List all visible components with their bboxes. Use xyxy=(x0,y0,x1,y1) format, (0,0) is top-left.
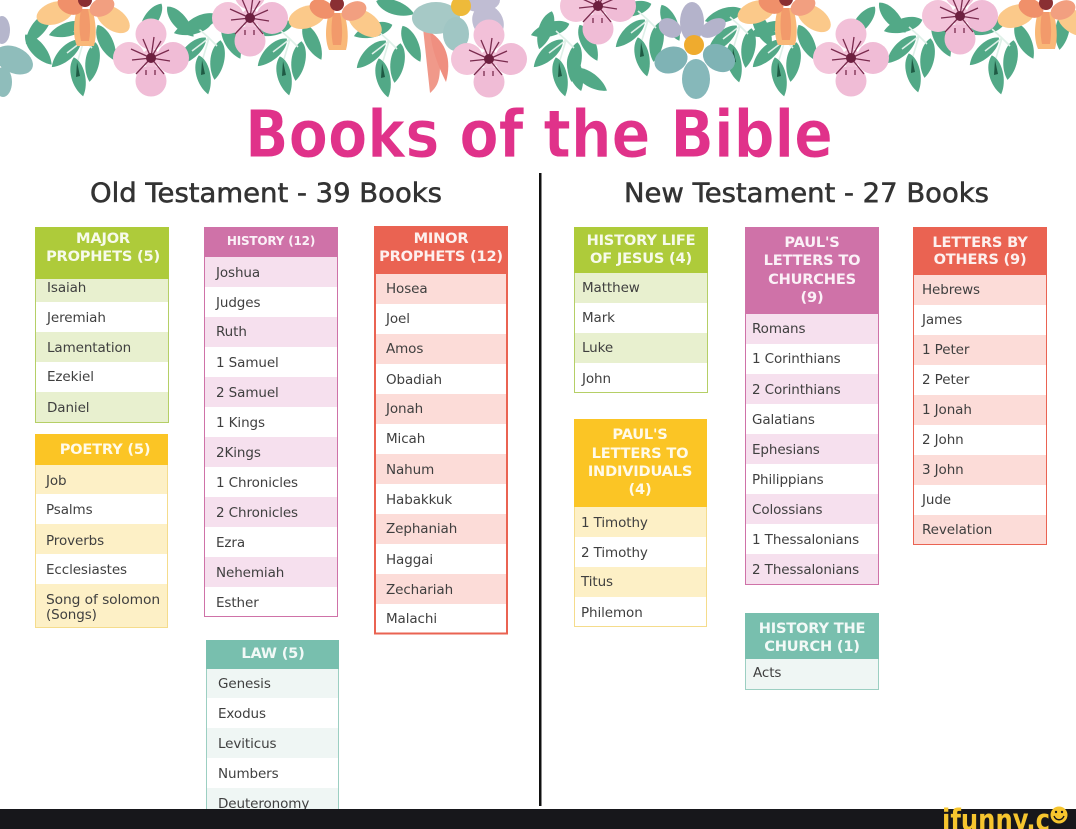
panel: history the church xyxy=(745,613,879,690)
panel: letters by others: 1 Jonah xyxy=(922,402,972,418)
panel: letters by others: OTHERS (9) xyxy=(934,251,1026,268)
panel: poetry xyxy=(35,434,168,628)
panel: poetry: POETRY (5) xyxy=(60,441,150,458)
panel: paul's letters to churches: 1 Thessalonians xyxy=(752,532,859,548)
panel: minor prophets: Haggai xyxy=(386,552,433,568)
panel: law: Leviticus xyxy=(218,736,277,752)
panel: history the church: HISTORY THE xyxy=(759,620,865,637)
panel: major prophets: Isaiah xyxy=(47,280,86,296)
panel: poetry: Song of solomon xyxy=(46,592,160,608)
panel: paul's letters to churches: 2 Thessalonians xyxy=(752,562,859,578)
panel: history: Ruth xyxy=(216,324,247,340)
panel: major prophets xyxy=(35,227,169,422)
panel: letters by others: Hebrews xyxy=(922,282,980,298)
panel: minor prophets: Nahum xyxy=(386,462,434,478)
panel: poetry: Psalms xyxy=(46,502,93,518)
panel: paul's letters to churches: LETTERS TO xyxy=(764,252,860,269)
panel: law: LAW (5) xyxy=(241,645,305,662)
panel: letters by others: 1 Peter xyxy=(922,342,970,358)
panel: letters by others: Revelation xyxy=(922,522,992,538)
panel: paul's letters to churches: Romans xyxy=(752,321,806,337)
panel: letters by others: 3 John xyxy=(922,462,964,478)
panel: major prophets: Lamentation xyxy=(47,340,131,356)
panel: history: Ezra xyxy=(216,535,245,551)
panel: minor prophets: Amos xyxy=(386,341,423,357)
heading: old testament: Old Testament - 39 Books xyxy=(90,178,442,209)
panel: minor prophets: MINOR xyxy=(414,230,468,247)
panel: letters by others: 2 John xyxy=(922,432,964,448)
panel: history: 2 Samuel xyxy=(216,385,279,401)
panel: history xyxy=(204,227,338,616)
panel: history the church: Acts xyxy=(753,665,781,681)
panel: history life of jesus: Luke xyxy=(582,340,613,356)
panel: minor prophets: Micah xyxy=(386,431,425,447)
panel: paul's letters to churches xyxy=(745,227,879,584)
panel: history: HISTORY (12) xyxy=(227,234,315,248)
panel: paul's letters to churches: Ephesians xyxy=(752,442,820,458)
teal lavender flower right xyxy=(651,2,740,99)
panel: history life of jesus: Mark xyxy=(582,310,615,326)
panel: poetry: (Songs) xyxy=(46,607,97,623)
panel: major prophets: Ezekiel xyxy=(47,369,94,385)
title: Books of the Bible xyxy=(245,96,833,173)
footer bar xyxy=(0,803,1076,829)
panel: history: 2Kings xyxy=(216,445,261,461)
panel: minor prophets: Obadiah xyxy=(386,372,442,388)
panel: paul's letters to individuals: 1 Timothy xyxy=(581,515,648,531)
panel: letters by others: Jude xyxy=(921,492,951,508)
panel: paul's letters to individuals: LETTERS TO xyxy=(592,445,688,462)
panel: minor prophets: Hosea xyxy=(386,281,428,297)
panel: minor prophets: Habakkuk xyxy=(386,492,452,508)
panel: history: Esther xyxy=(216,595,259,611)
panel: paul's letters to individuals: Titus xyxy=(580,574,613,590)
panel: history the church: CHURCH (1) xyxy=(764,638,860,655)
panel: paul's letters to churches: (9) xyxy=(801,289,823,306)
panel: history: 1 Samuel xyxy=(216,355,279,371)
panel: minor prophets xyxy=(374,226,508,634)
pink flowers xyxy=(113,18,189,96)
panel: paul's letters to individuals: Philemon xyxy=(581,605,643,621)
panel: poetry: Proverbs xyxy=(46,533,104,549)
panel: minor prophets: PROPHETS (12) xyxy=(379,248,503,265)
panel: letters by others xyxy=(913,227,1047,544)
panel: letters by others: 2 Peter xyxy=(922,372,970,388)
panel: history life of jesus: HISTORY LIFE xyxy=(587,232,695,249)
panel: major prophets: Daniel xyxy=(47,400,89,416)
panel: history life of jesus: John xyxy=(581,371,611,387)
panel: history: Judges xyxy=(215,295,260,311)
panel: history life of jesus xyxy=(574,227,708,392)
panel: paul's letters to churches: 2 Corinthians xyxy=(752,382,841,398)
panel: minor prophets: Zephaniah xyxy=(386,521,457,537)
floral garland xyxy=(0,0,1076,99)
panel: letters by others: LETTERS BY xyxy=(932,234,1028,251)
panel: history life of jesus: OF JESUS (4) xyxy=(590,250,692,267)
panel: history life of jesus: Matthew xyxy=(582,280,640,296)
panel: law: Numbers xyxy=(218,766,279,782)
panel: major prophets: MAJOR xyxy=(76,230,130,247)
panel: paul's letters to individuals: 2 Timothy xyxy=(581,545,648,561)
orange flowers xyxy=(34,0,135,46)
panel: history: Joshua xyxy=(215,265,260,281)
panel: paul's letters to individuals: INDIVIDUALS xyxy=(588,463,692,480)
panel: paul's letters to churches: Galatians xyxy=(752,412,815,428)
panel: minor prophets: Joel xyxy=(385,311,410,327)
panel: paul's letters to individuals: (4) xyxy=(629,481,651,498)
panel: minor prophets: Malachi xyxy=(386,611,437,627)
panel: major prophets: PROPHETS (5) xyxy=(46,248,160,265)
panel: law: Deuteronomy xyxy=(218,796,309,812)
panel: paul's letters to individuals xyxy=(574,419,707,626)
panel: paul's letters to churches: CHURCHES xyxy=(768,271,856,288)
panel: paul's letters to churches: PAUL'S xyxy=(784,234,840,251)
panel: paul's letters to churches: Colossians xyxy=(752,502,822,518)
panel: history: 1 Chronicles xyxy=(216,475,298,491)
divider xyxy=(539,173,542,806)
panel: history: 1 Kings xyxy=(216,415,265,431)
teal lavender flower centre xyxy=(412,0,510,93)
panel: minor prophets: Zechariah xyxy=(386,582,453,598)
teal flower left xyxy=(0,16,38,97)
panel: paul's letters to churches: 1 Corinthians xyxy=(752,351,841,367)
icon: smiley xyxy=(1050,806,1068,824)
panel: paul's letters to individuals: PAUL'S xyxy=(612,426,668,443)
panel: paul's letters to churches: Philippians xyxy=(752,472,824,488)
panel: law: Genesis xyxy=(218,676,271,692)
panel: law: Exodus xyxy=(218,706,266,722)
panel: letters by others: James xyxy=(921,312,962,328)
panel: major prophets: Jeremiah xyxy=(46,310,106,326)
panel: history: 2 Chronicles xyxy=(216,505,298,521)
panel: law xyxy=(206,640,339,818)
panel: poetry: Ecclesiastes xyxy=(46,562,127,578)
panel: minor prophets: Jonah xyxy=(385,401,423,417)
heading: new testament: New Testament - 27 Books xyxy=(624,178,989,209)
panel: history: Nehemiah xyxy=(216,565,284,581)
panel: poetry: Job xyxy=(45,473,67,489)
